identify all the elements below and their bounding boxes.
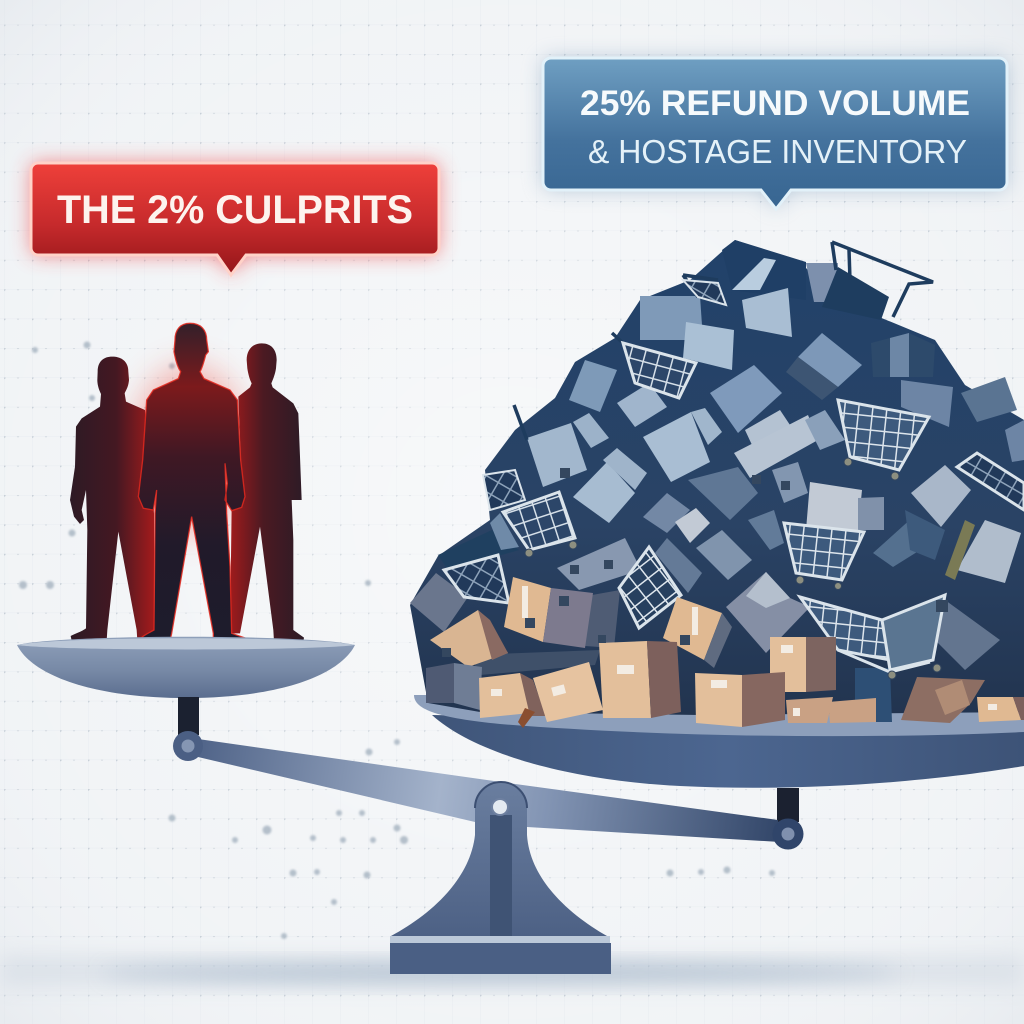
figure: centre man	[138, 323, 245, 641]
left hinge	[173, 731, 203, 761]
callout subheading: hostage inventory: & HOSTAGE INVENTORY	[588, 133, 967, 170]
right hinge	[772, 818, 804, 850]
box tape details	[442, 468, 948, 657]
cart wheels	[525, 458, 941, 679]
callout: refund volume	[543, 58, 1007, 209]
scale posts	[178, 697, 799, 822]
callout heading: culprits: THE 2% CULPRITS	[57, 188, 413, 232]
right pan	[414, 695, 1024, 788]
left pan	[17, 637, 355, 698]
box labels	[491, 586, 997, 716]
scale beam	[198, 739, 780, 842]
ground shadow	[0, 955, 1024, 987]
figure: right man	[230, 343, 304, 641]
callout: the 2% culprits	[31, 163, 439, 275]
scale stand	[390, 782, 611, 974]
figures: three culprits	[70, 323, 304, 641]
blue boxes	[410, 240, 1024, 722]
shopping carts	[444, 280, 1024, 672]
cart handles	[514, 242, 933, 440]
pile of returned goods	[410, 240, 1024, 728]
tan cardboard boxes	[426, 577, 1024, 728]
red glow behind figures	[132, 365, 248, 535]
figure: left man	[70, 357, 154, 641]
callout heading: refund volume: 25% REFUND VOLUME	[580, 84, 970, 123]
heap backing	[410, 240, 1024, 715]
